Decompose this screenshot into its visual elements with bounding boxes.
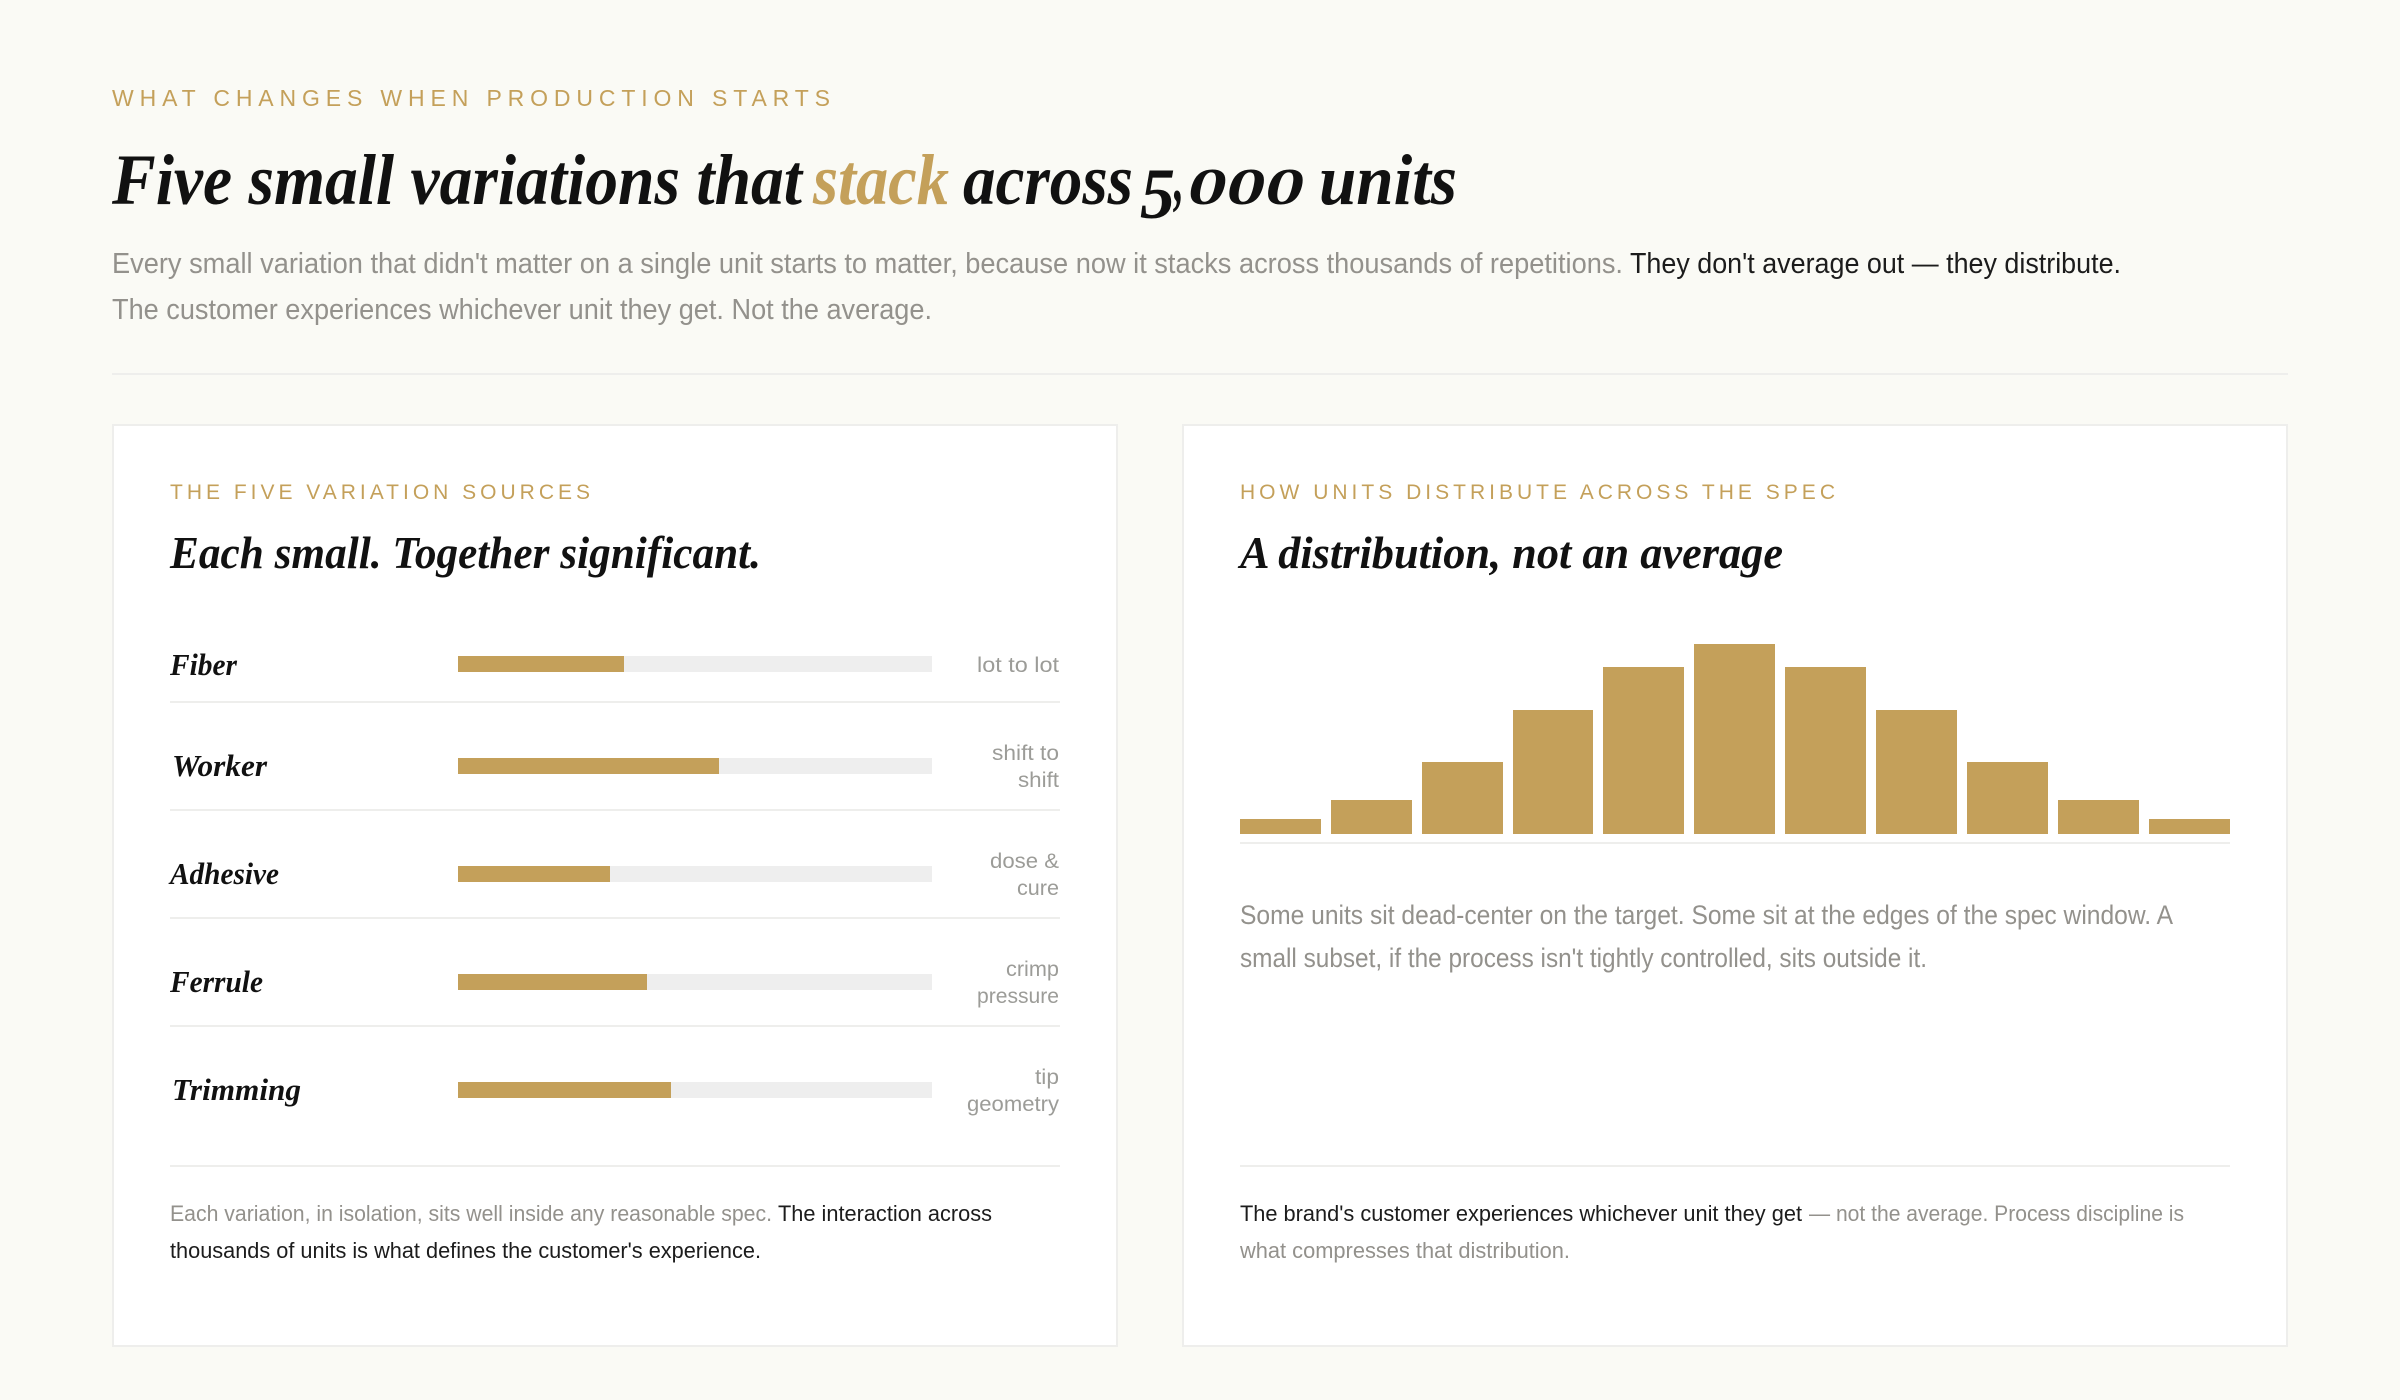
row: trimming: geometry bbox=[967, 1093, 1060, 1116]
footnote: right panel: The brand's customer experiences whichever unit they get bbox=[1240, 1201, 1803, 1226]
row: adhesive: dose & bbox=[990, 850, 1059, 873]
histogram chart bbox=[1240, 644, 2230, 834]
row: adhesive bbox=[168, 850, 1059, 900]
row: adhesive: cure bbox=[1017, 877, 1059, 900]
row: worker bbox=[172, 742, 1059, 792]
subtitle paragraph: The customer experiences whichever unit they get. Not the average. bbox=[112, 294, 932, 326]
footnote: left panel: The interaction across bbox=[778, 1201, 992, 1226]
footnote: left panel: Each variation, in isolation, sits well inside any reasonable spec. bbox=[170, 1201, 772, 1226]
panel label: HOW UNITS DISTRIBUTE ACROSS THE SPEC bbox=[1240, 481, 1835, 504]
subtitle paragraph bbox=[112, 248, 2121, 326]
eyebrow: section label: WHAT CHANGES WHEN PRODUCTION STARTS bbox=[112, 85, 830, 111]
row: worker: Worker bbox=[172, 748, 268, 783]
panel: the five variation sources bbox=[113, 425, 1117, 1346]
chart description bbox=[1240, 900, 2173, 973]
footnote: right panel: — not the average. Process discipline is bbox=[1809, 1201, 2184, 1226]
panel heading: Each small. Together significant. bbox=[169, 527, 761, 578]
subtitle paragraph: Every small variation that didn't matter on a single unit starts to matter, because now it stacks across thousands of repetitions. bbox=[112, 248, 1623, 280]
title: across bbox=[963, 140, 1133, 220]
title: units bbox=[1319, 140, 1457, 220]
row: ferrule: crimp bbox=[1006, 958, 1059, 981]
row: worker: shift to bbox=[992, 742, 1059, 765]
row: fiber bbox=[169, 647, 1059, 682]
footnote: left panel: thousands of units is what defines the customer's experience. bbox=[170, 1238, 761, 1263]
chart description: Some units sit dead-center on the target. Some sit at the edges of the spec window. A bbox=[1240, 900, 2173, 930]
footnote: left panel bbox=[170, 1201, 992, 1263]
title: , bbox=[1173, 137, 1184, 217]
row: ferrule: pressure bbox=[977, 985, 1059, 1008]
title: 5 bbox=[1140, 154, 1175, 234]
row: adhesive: Adhesive bbox=[168, 856, 279, 891]
panel: distribution across the spec bbox=[1183, 425, 2287, 1346]
row: trimming: Trimming bbox=[172, 1072, 301, 1107]
footnote: right panel: what compresses that distribution. bbox=[1239, 1238, 1570, 1263]
title: 000 bbox=[1188, 159, 1304, 216]
title: stack bbox=[812, 140, 949, 220]
footnote: right panel bbox=[1239, 1201, 2184, 1263]
row: worker: shift bbox=[1018, 769, 1059, 792]
panel heading: A distribution, not an average bbox=[1237, 527, 1783, 578]
row: trimming: tip bbox=[1035, 1066, 1059, 1089]
row: trimming bbox=[172, 1066, 1060, 1116]
title: Five small variations that bbox=[111, 140, 804, 220]
row: fiber: lot to lot bbox=[977, 654, 1059, 677]
row: ferrule: Ferrule bbox=[169, 964, 263, 999]
subtitle paragraph: They don't average out — they distribute. bbox=[1630, 248, 2121, 280]
panel label: THE FIVE VARIATION SOURCES bbox=[170, 481, 590, 504]
chart description: small subset, if the process isn't tightly controlled, sits outside it. bbox=[1240, 943, 1927, 973]
row: fiber: Fiber bbox=[169, 647, 238, 682]
row: ferrule bbox=[169, 958, 1059, 1008]
